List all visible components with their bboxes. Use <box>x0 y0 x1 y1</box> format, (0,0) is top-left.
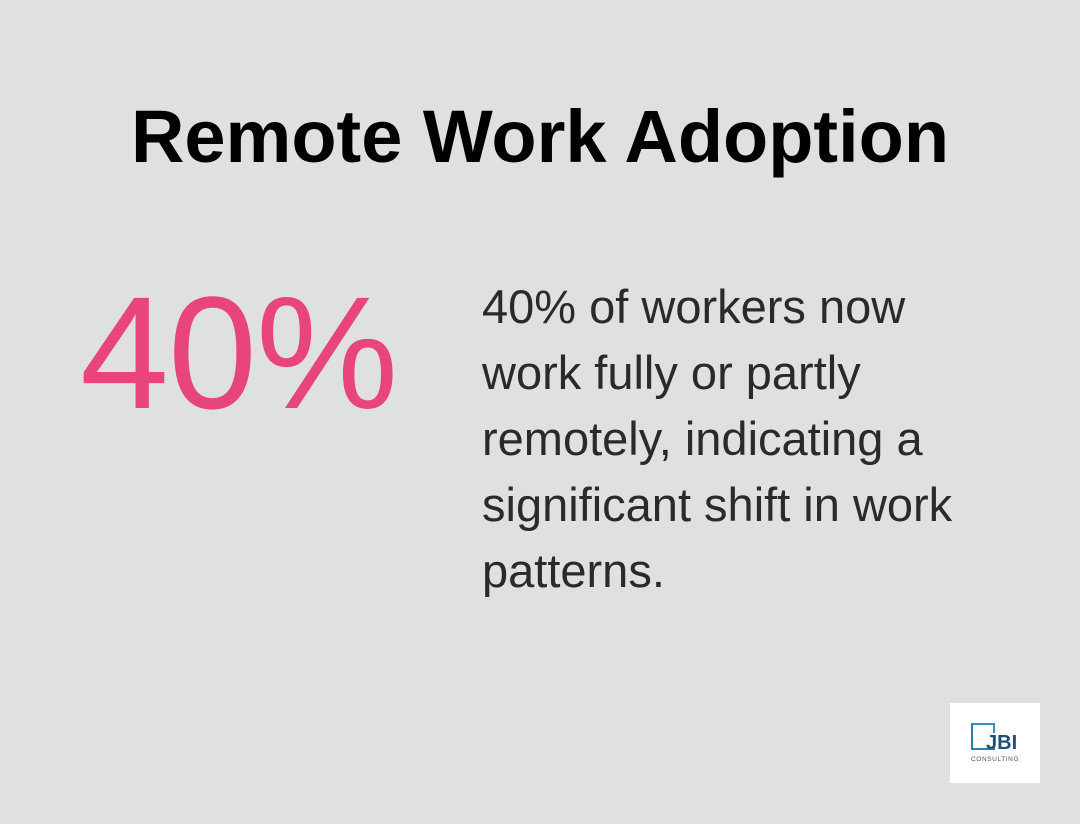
description text: patterns. <box>482 544 665 597</box>
title: Remote Work Adoption <box>131 95 949 178</box>
logo: JBI <box>986 732 1017 754</box>
description text: significant shift in work <box>482 478 952 531</box>
description text: remotely, indicating a <box>482 412 923 465</box>
big stat: 40% <box>80 263 397 442</box>
description text: work fully or partly <box>482 346 861 399</box>
description text: 40% of workers now <box>482 280 905 333</box>
logo: CONSULTING <box>971 756 1019 763</box>
description text <box>482 280 952 597</box>
logo <box>950 703 1040 783</box>
